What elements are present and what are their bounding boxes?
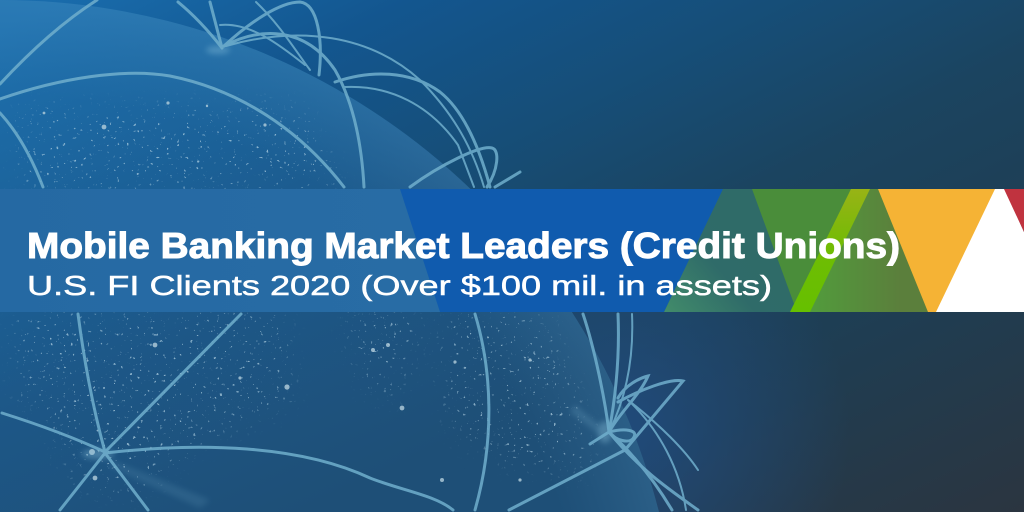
band: left translucent blue xyxy=(0,189,440,312)
title: Mobile Banking Market Leaders (Credit Unions) xyxy=(27,225,900,266)
city lights xyxy=(43,101,532,482)
band: lime stripe xyxy=(790,189,870,312)
network arcs: lower globe xyxy=(2,314,698,510)
band: teal triangle xyxy=(664,189,798,312)
globe illustration xyxy=(0,0,659,512)
network arcs: upper globe xyxy=(0,0,520,187)
band: royal blue segment xyxy=(400,189,724,312)
banner band xyxy=(0,189,1024,312)
band: orange triangle xyxy=(878,189,996,312)
background glow beside globe xyxy=(390,200,850,512)
band: green segment xyxy=(752,189,852,312)
subtitle: U.S. FI Clients 2020 (Over $100 mil. in assets) xyxy=(27,270,772,301)
band: red corner xyxy=(1004,189,1024,232)
hub glows xyxy=(82,46,612,508)
band: olive triangle xyxy=(809,189,930,312)
band: white shape xyxy=(936,189,1024,312)
